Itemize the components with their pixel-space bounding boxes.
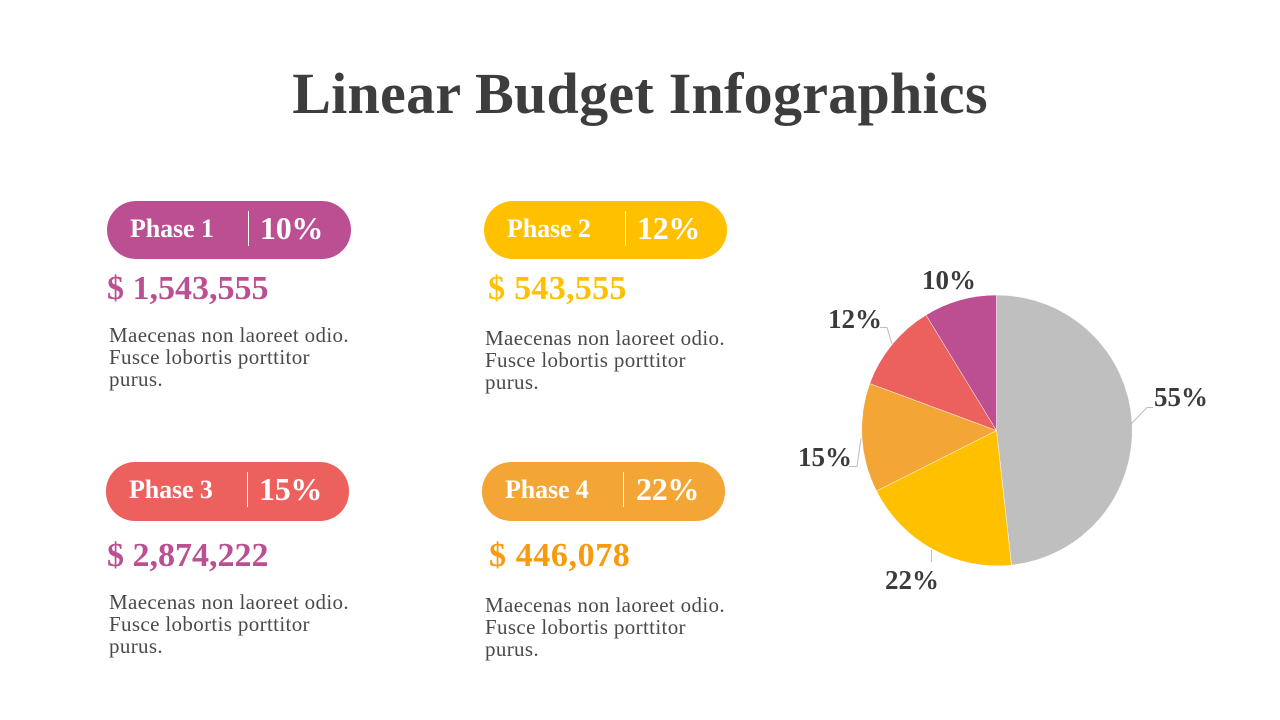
pill: phase 3: 15%	[259, 471, 322, 507]
slice: 22% yellow	[876, 430, 1012, 566]
panel: phase 3	[106, 462, 349, 658]
text: phase 1: Maecenas non laoreet odio.	[109, 323, 349, 347]
pill: phase 1: Phase 1	[130, 214, 214, 243]
panel: phase 4	[482, 462, 725, 661]
text: phase 4: Maecenas non laoreet odio.	[485, 593, 725, 617]
text: phase 3: purus.	[109, 634, 163, 658]
amount: phase 1: $ 1,543,555	[107, 270, 268, 307]
text: phase 1: Fusce lobortis porttitor	[109, 345, 310, 369]
text: phase 4	[485, 593, 725, 661]
leader lines	[849, 328, 1153, 562]
text: phase 2: Maecenas non laoreet odio.	[485, 326, 725, 350]
text: phase 3: Fusce lobortis porttitor	[109, 612, 310, 636]
title: Linear Budget Infographics	[292, 61, 988, 126]
panel: phase 1	[107, 201, 351, 391]
label: 22%: 22%	[885, 565, 939, 595]
text: phase 4: Fusce lobortis porttitor	[485, 615, 686, 639]
amount: phase 4: $ 446,078	[489, 537, 630, 574]
text: phase 1	[109, 323, 349, 391]
amount: phase 3: $ 2,874,222	[107, 537, 268, 574]
text: phase 3: Maecenas non laoreet odio.	[109, 590, 349, 614]
text: phase 4: purus.	[485, 637, 539, 661]
text: phase 2: purus.	[485, 370, 539, 394]
label: 12%: 12%	[828, 304, 882, 334]
pill: phase 1	[107, 201, 351, 259]
pill: phase 2: 12%	[637, 210, 700, 246]
slice: 55% grey	[996, 295, 1132, 565]
text: phase 3	[109, 590, 349, 658]
pill: phase 3: Phase 3	[129, 475, 213, 504]
pill: phase 4: Phase 4	[505, 475, 589, 504]
pill: phase 2: Phase 2	[507, 214, 591, 243]
pill: phase 4	[482, 462, 725, 521]
slice: 12% red	[870, 315, 996, 430]
slice: 15% orange	[862, 384, 996, 491]
text: phase 2	[485, 326, 725, 394]
pill: phase 2	[484, 201, 727, 259]
label: 15%: 15%	[798, 442, 852, 472]
label: 55%: 55%	[1154, 382, 1208, 412]
pie chart	[849, 295, 1153, 566]
pill: phase 3	[106, 462, 349, 521]
text: phase 1: purus.	[109, 367, 163, 391]
label: 10%: 10%	[922, 265, 976, 295]
text: phase 2: Fusce lobortis porttitor	[485, 348, 686, 372]
pill: phase 1: 10%	[260, 210, 323, 246]
panel: phase 2	[484, 201, 727, 394]
slice: 10% purple	[926, 295, 996, 430]
pill: phase 4: 22%	[636, 471, 699, 507]
amount: phase 2: $ 543,555	[488, 270, 627, 307]
